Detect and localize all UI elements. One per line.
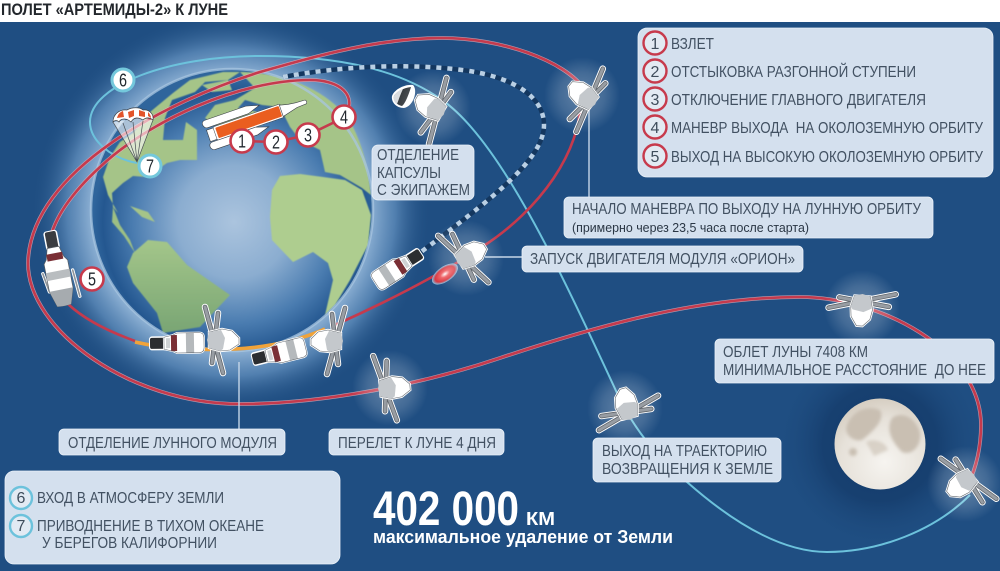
orbit: launch segment	[242, 117, 345, 142]
step markers on map: 1	[238, 132, 246, 152]
callout: flight to moon	[329, 429, 504, 455]
key figure: maximum distance	[373, 483, 673, 547]
callout: lunar orbit maneuver: НАЧАЛО МАНЕВРА ПО ВЫХОДУ НА ЛУННУЮ ОРБИТУ	[572, 201, 922, 218]
callout: lunar orbit maneuver: (примерно через 23,5 часа после старта)	[572, 220, 809, 235]
icon: rocket	[201, 87, 312, 151]
legend: steps 6-7: 6	[17, 490, 26, 507]
orbit: descending arc from apogee	[335, 100, 580, 325]
icon: capsule	[392, 85, 415, 108]
legend: steps 6-7: ПРИВОДНЕНИЕ В ТИХОМ ОКЕАНЕ	[37, 518, 264, 535]
key figure: maximum distance: 402 000	[373, 483, 519, 536]
icon: upper stage set	[149, 244, 427, 369]
legend: steps 1-5: 2	[651, 64, 660, 81]
icon: stage with folded panels	[35, 227, 81, 309]
step markers on map	[80, 69, 356, 290]
leader lines	[239, 108, 589, 429]
callout: Orion engine	[522, 246, 803, 272]
callout: lunar orbit maneuver	[564, 197, 933, 238]
key figure: maximum distance: максимальное удаление от Земли	[373, 527, 673, 547]
orbit: inner ascent arc	[50, 80, 349, 240]
legend: steps 6-7: 7	[17, 518, 26, 535]
icon: Orion spacecraft set	[205, 59, 996, 520]
earth globe	[31, 12, 431, 412]
legend: steps 1-5: ОТКЛЮЧЕНИЕ ГЛАВНОГО ДВИГАТЕЛЯ	[671, 92, 926, 109]
legend: steps 1-5	[638, 28, 993, 177]
callout: capsule separation: КАПСУЛЫ	[377, 165, 441, 182]
step markers on map: 6	[119, 70, 127, 90]
callout: capsule separation: ОТДЕЛЕНИЕ	[377, 147, 459, 164]
header title	[0, 0, 1000, 22]
icon: Orion spacecraft glows	[352, 57, 1000, 522]
moon	[775, 339, 985, 549]
key figure: maximum distance: КМ	[526, 509, 555, 529]
callout: return trajectory: ВОЗВРАЩЕНИЯ К ЗЕМЛЕ	[602, 461, 773, 478]
header title: ПОЛЕТ «АРТЕМИДЫ-2» К ЛУНЕ	[1, 0, 228, 19]
step markers on map: 5	[88, 270, 96, 290]
callout: lunar module separation: ОТДЕЛЕНИЕ ЛУННОГО МОДУЛЯ	[68, 435, 277, 452]
legend: steps 6-7: ВХОД В АТМОСФЕРУ ЗЕМЛИ	[37, 490, 224, 507]
legend: steps 1-5: 5	[651, 149, 660, 166]
legend: steps 1-5: 1	[651, 36, 660, 53]
orbit: outer high earth orbit and lunar transfer	[28, 38, 981, 485]
legend: steps 6-7	[5, 471, 340, 564]
callout: flight to moon: ПЕРЕЛЕТ К ЛУНЕ 4 ДНЯ	[338, 435, 496, 452]
callout: capsule separation	[372, 145, 474, 200]
callout: lunar flyby: ОБЛЕТ ЛУНЫ 7408 КМ	[723, 344, 868, 361]
callout: lunar module separation	[59, 429, 285, 455]
legend: steps 6-7: У БЕРЕГОВ КАЛИФОРНИИ	[42, 535, 217, 552]
orbit: orange engine burn arc	[135, 329, 325, 349]
legend: steps 1-5: ВЗЛЕТ	[671, 36, 714, 53]
dashed capsule separation trajectory	[283, 66, 544, 252]
step markers on map: 2	[272, 132, 280, 152]
legend: steps 1-5: ОТСТЫКОВКА РАЗГОННОЙ СТУПЕНИ	[671, 62, 916, 81]
callout: return trajectory	[593, 438, 781, 482]
step markers on map: 3	[304, 126, 312, 146]
callout: lunar flyby	[715, 339, 994, 383]
orbit: return trajectory	[90, 56, 970, 552]
step markers on map: 4	[340, 108, 348, 128]
orbit: low arc to perigee	[68, 304, 135, 341]
callout: return trajectory: ВЫХОД НА ТРАЕКТОРИЮ	[602, 443, 767, 460]
legend: steps 1-5: 4	[651, 120, 660, 137]
icon: parachutes	[113, 108, 153, 162]
legend: steps 1-5: 3	[651, 92, 660, 109]
step markers on map: 7	[146, 156, 154, 176]
icon: Orion burn flame	[428, 259, 462, 289]
callout: capsule separation: С ЭКИПАЖЕМ	[377, 182, 470, 199]
callout: Orion engine: ЗАПУСК ДВИГАТЕЛЯ МОДУЛЯ «ОРИОН»	[530, 251, 795, 268]
